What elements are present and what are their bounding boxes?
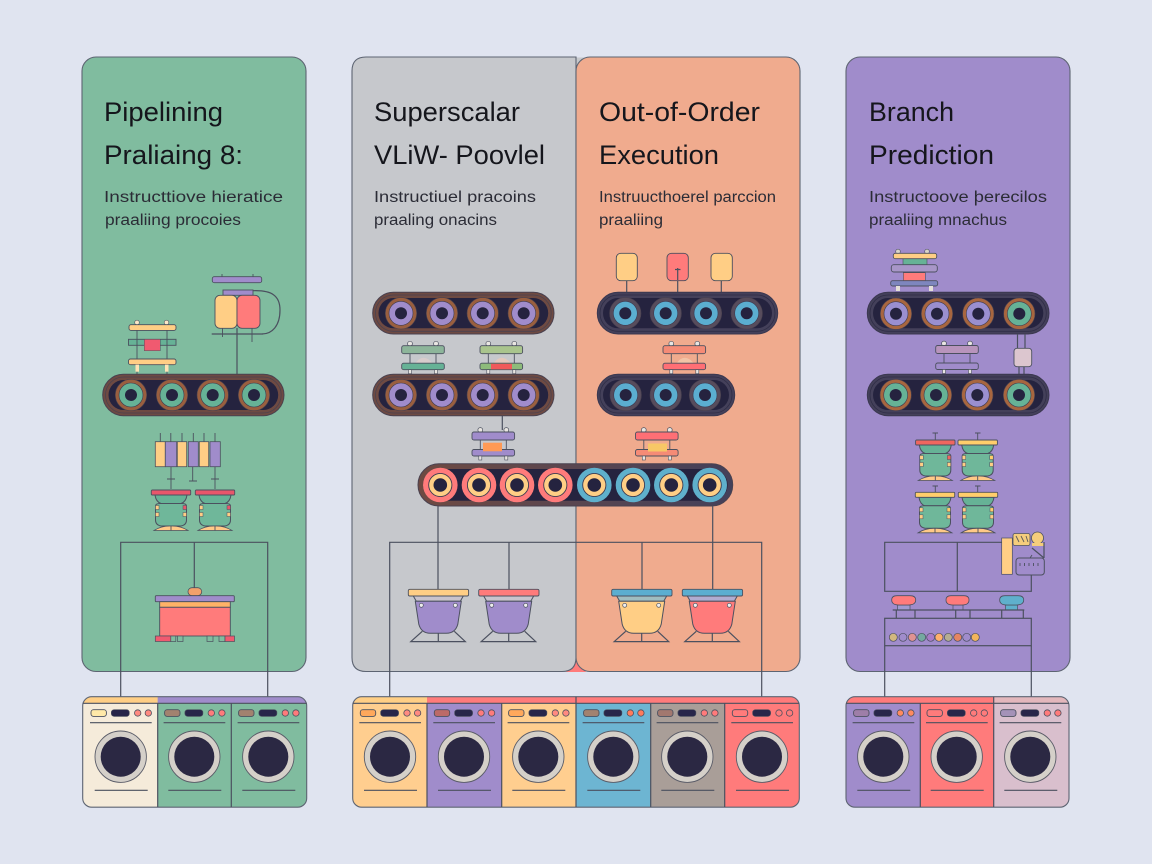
- panel: pipelining: [82, 57, 306, 672]
- icon: pot, red rim, purple body: [479, 589, 539, 642]
- washer 5: [657, 710, 718, 790]
- red notch between panels: [566, 660, 586, 672]
- wiring: middle panels to washers: [390, 506, 762, 697]
- heading: superscalar: Superscalar: [374, 97, 520, 127]
- icon: two green pots: [151, 490, 235, 530]
- icon: three mushroom valves: [892, 596, 1024, 610]
- icon: three instruction boxes: [616, 253, 732, 292]
- conveyor belt: upper: [373, 292, 554, 334]
- washer 1: [359, 710, 421, 790]
- icon: press purple and orange: [472, 428, 515, 460]
- icon: pot, blue rim, yellow body: [612, 589, 672, 642]
- control deck with bead row: [885, 610, 1031, 646]
- text block: out-of-order description: [599, 189, 776, 229]
- panel: superscalar: [352, 57, 590, 672]
- washer 4: [583, 710, 644, 790]
- heading: superscalar: [374, 97, 545, 170]
- conveyor belt with four wheels: [103, 374, 284, 416]
- washer 1: [90, 710, 152, 790]
- text block: branch description: [869, 189, 1047, 229]
- washer 3: [1000, 710, 1061, 790]
- icon: tall press stack: [891, 249, 938, 291]
- connector to lower press: [501, 416, 503, 430]
- conveyor belt: lower: [373, 374, 554, 416]
- conveyor belt: upper blue: [597, 292, 778, 334]
- table on legs: [155, 588, 234, 642]
- heading: out-of-order execution: Out-of-Order: [599, 97, 760, 127]
- text block: branch description: praaliing mnachus: [869, 212, 1007, 229]
- text block: pipelining description: [104, 189, 283, 229]
- conveyor belt: upper mixed wheels: [867, 292, 1049, 334]
- text block: pipelining description: praaliing procoies: [105, 212, 241, 229]
- washers: pipelining row: [82, 696, 308, 808]
- washer 2: [926, 710, 988, 790]
- washer 2: [164, 710, 225, 790]
- text block: branch description: Instructoove þerecilos: [869, 189, 1047, 206]
- icon: tube, box, bulb and basket: [1002, 532, 1044, 575]
- text block: superscalar description: [374, 189, 536, 229]
- heading: out-of-order execution: [599, 97, 760, 170]
- washer 3: [508, 710, 569, 790]
- washers: branch row: [846, 696, 1070, 808]
- icon: pink switch box: [1014, 334, 1032, 374]
- heading: pipelining: Pipelining: [104, 97, 223, 127]
- washer 1: [853, 710, 914, 790]
- text block: superscalar description: Instructiuel pracoins: [374, 189, 536, 206]
- text block: superscalar description: praaling onacins: [374, 212, 497, 229]
- icon: pot, blue rim, red body: [682, 589, 743, 642]
- icon: hopper with two bins: [212, 274, 280, 374]
- wiring: branch panel to washers: [885, 646, 1031, 697]
- heading: branch prediction: [869, 97, 994, 170]
- icon: press purple: [936, 341, 978, 374]
- heading: pipelining: [104, 97, 243, 170]
- wiring frame: [885, 542, 1031, 591]
- text block: out-of-order description: praaliing: [599, 212, 663, 229]
- text block: out-of-order description: Instruucthoerel parccion: [599, 189, 776, 206]
- washer 6: [731, 710, 793, 790]
- icon: four green pots: [915, 433, 998, 533]
- conveyor belt: lower mixed wheels: [867, 374, 1049, 416]
- panel: branch prediction: [846, 57, 1070, 672]
- text block: pipelining description: Instructtiove hieratice: [104, 189, 283, 206]
- washer 2: [433, 710, 495, 790]
- large shared conveyor belt: [418, 464, 733, 506]
- heading: out-of-order execution: Execution: [599, 140, 719, 170]
- icon: press red and yellow: [636, 428, 678, 460]
- conveyor belt: lower blue: [597, 374, 735, 416]
- heading: branch prediction: Prediction: [869, 140, 994, 170]
- wiring: panel one to washers: [121, 542, 268, 697]
- icon: press red: [663, 341, 706, 374]
- heading: branch prediction: Branch: [869, 97, 954, 127]
- washer 3: [238, 710, 299, 790]
- washers: middle row: [352, 696, 800, 808]
- icon: pot, yellow rim, purple body: [408, 589, 469, 642]
- icon: press green and red: [480, 341, 523, 374]
- heading: superscalar: VLiW- Poovlel: [374, 140, 545, 170]
- panel: out-of-order execution: [576, 57, 800, 672]
- icon: press green: [402, 341, 444, 374]
- icon: row of test tubes: [155, 433, 220, 489]
- heading: pipelining: Praliaing 8:: [104, 140, 243, 170]
- icon: press stack: [128, 320, 176, 374]
